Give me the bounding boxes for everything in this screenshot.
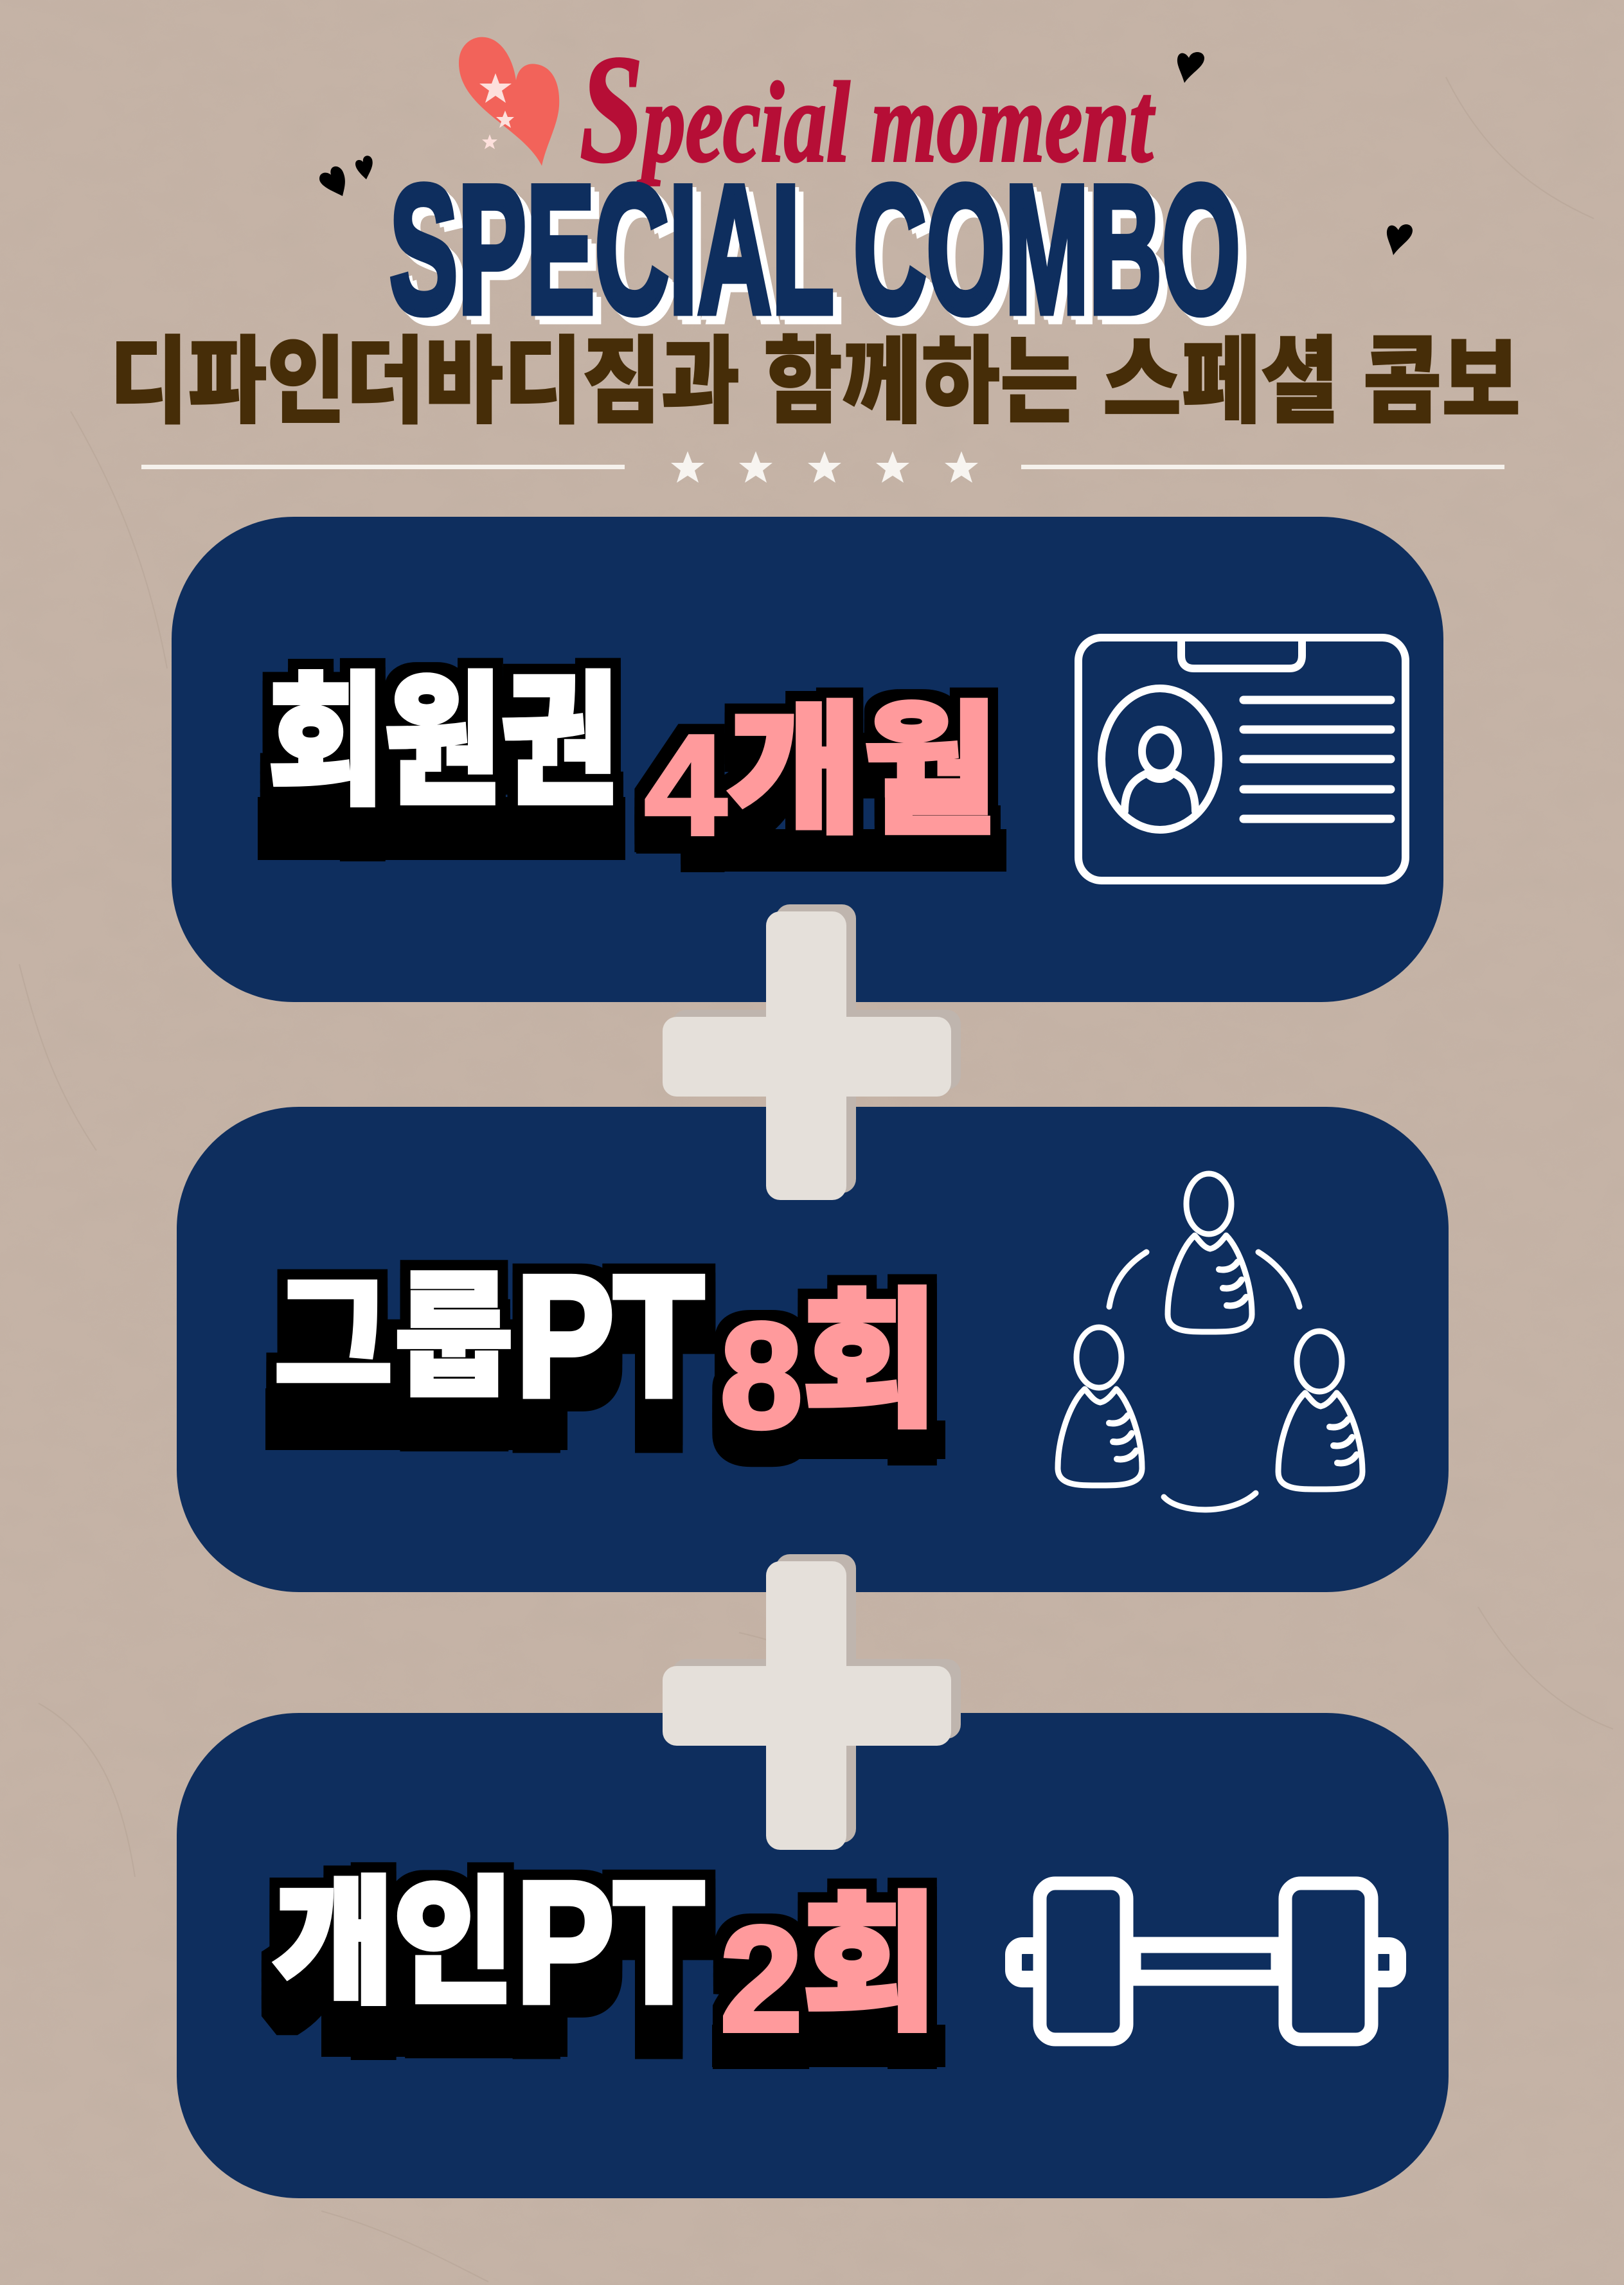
value: 4개월: 4 — [645, 706, 727, 865]
value: 2회: 2 — [720, 1896, 802, 2063]
decorative black hearts — [319, 52, 1413, 255]
label: 그룹PT: PT — [516, 1240, 704, 1432]
shadow block: 회원권 — [258, 797, 625, 860]
plus sign: second — [663, 1554, 961, 1850]
icon: three people in circle — [1058, 1174, 1362, 1510]
title: SPECIAL COMBO: COMBO — [853, 148, 1240, 352]
shadow block: 개인PT — [321, 1993, 567, 2057]
shadow block: 2회 — [712, 2025, 945, 2067]
icon: member ID card — [1078, 638, 1405, 881]
value: 4개월: 개월 — [727, 692, 998, 851]
script heading: Special moment: Special moment — [580, 23, 1155, 194]
value: 8회: 8 — [720, 1293, 802, 1459]
value: 8회: 회 — [802, 1278, 938, 1445]
value: 2회: 회 — [802, 1882, 938, 2048]
title: SPECIAL COMBO: SPECIAL — [389, 148, 834, 352]
panel: personal PT — [177, 1713, 1449, 2198]
label: 개인PT — [273, 1846, 704, 2038]
label: 그룹PT: 그룹 — [273, 1262, 514, 1413]
panel: membership — [172, 517, 1443, 1002]
divider with five stars — [141, 451, 1504, 483]
plus sign: first — [663, 904, 961, 1200]
label: 회원권: 회원권 — [268, 663, 618, 822]
label: 개인PT: 개인 — [273, 1867, 514, 2020]
shadow block: 8회 — [771, 1420, 945, 1459]
icon: coral heart with stars — [459, 37, 559, 166]
shadow block: 4개월 — [636, 816, 1006, 872]
label: 그룹PT — [273, 1240, 704, 1432]
panel: group PT — [177, 1107, 1449, 1592]
shadow block: 그룹PT — [265, 1388, 567, 1450]
label: 개인PT: PT — [516, 1846, 704, 2038]
icon: barbell — [1013, 1883, 1398, 2039]
